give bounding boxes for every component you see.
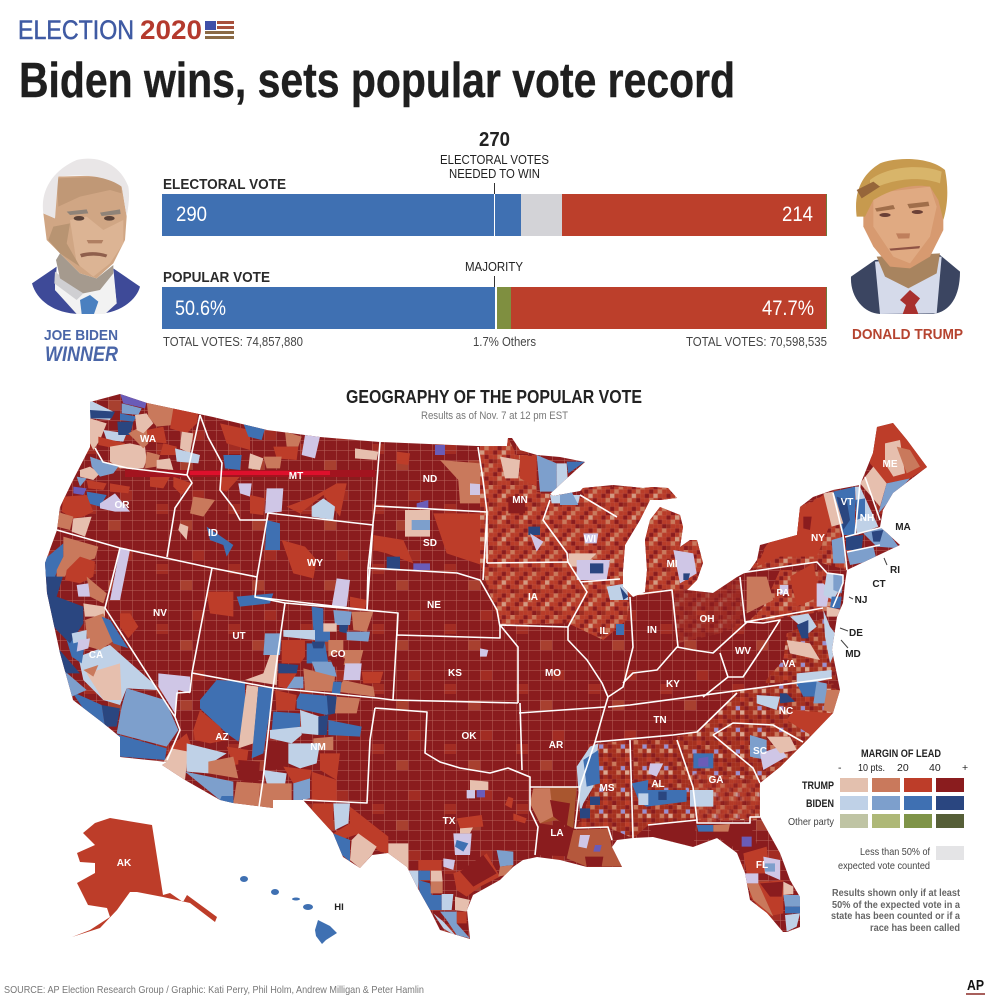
legend note: race has been called [870,923,960,934]
header logo: Election 2020: 2020 [140,15,202,45]
vote totals [163,335,827,349]
270 threshold label [440,129,549,194]
legend: margin of lead: - [838,762,842,774]
state labels: NV [153,608,167,619]
map: Hawaii: HI [334,902,344,913]
county map of the lower 48 states [30,380,940,950]
state labels: LA [550,828,564,839]
artifact streak across Montana [125,470,375,477]
map: Hawaii [240,876,344,944]
map: Alaska [72,818,217,937]
state labels: TN [653,715,667,726]
state labels: WI [584,534,596,545]
portrait: Donald Trump [851,159,960,314]
state labels: NE [427,600,441,611]
legend: margin of lead: 10 pts. [858,762,885,774]
state labels: WY [307,558,323,569]
state labels: AL [651,779,665,790]
state labels: VT [841,497,853,508]
patches: Arizona and New Mexico south [162,740,340,808]
state labels: MN [512,495,528,506]
state labels: MT [289,471,303,482]
bar chart: electoral vote [162,194,827,236]
state labels: WA [140,434,156,445]
name: Donald Trump: DONALD TRUMP [852,326,963,343]
state labels: IL [600,626,608,637]
legend note: state has been counted or if a [831,911,960,922]
patches: western states [40,393,492,765]
legend note: Results shown only if at least [832,888,961,899]
map heading: GEOGRAPHY OF THE POPULAR VOTE [346,387,642,407]
bar chart: popular vote: 47.7% [762,297,814,320]
state labels: TX [443,816,456,827]
state labels: IN [647,625,657,636]
legend: margin of lead: expected vote counted [838,860,930,872]
state labels: ID [208,528,218,539]
legend: margin of lead [788,748,968,872]
state labels: ND [423,474,437,485]
state labels: GA [708,775,724,786]
state labels: MO [545,668,561,679]
outside state labels with pointers: DE [849,628,863,639]
header logo: Election 2020: ELECTION [18,15,134,45]
state boundaries [57,415,883,855]
state labels: ME [882,459,898,470]
270 threshold label: 270 [479,129,510,151]
popular vote heading: POPULAR VOTE [163,270,270,286]
map heading [346,387,642,422]
270 threshold label: NEEDED TO WIN [449,167,540,181]
majority label [465,260,524,287]
bar chart: electoral vote: 290 [176,203,207,226]
legend note [831,888,961,934]
state labels: PA [776,588,790,599]
vote totals: 1.7% Others [473,335,536,349]
legend: margin of lead: Other party [788,816,835,828]
state labels [89,434,898,871]
state labels: AR [549,740,564,751]
outside state labels with pointers [840,522,911,660]
legend: margin of lead: 20 [897,762,909,774]
legend: margin of lead: 40 [929,762,941,774]
patches: eastern states [480,420,928,820]
state labels: OH [700,614,714,625]
source line: SOURCE: AP Election Research Group / Graphic: Kati Perry, Phil Holm, Andrew Milligan & Peter Hamlin [4,984,424,996]
state labels: VA [782,659,796,670]
outside state labels with pointers: NJ [855,595,867,606]
legend: margin of lead: MARGIN OF LEAD [861,748,941,760]
state labels: CO [330,649,346,660]
state labels: KS [448,668,462,679]
outside state labels with pointers: MD [845,649,861,660]
electoral vote heading: ELECTORAL VOTE [163,177,286,193]
majority label: MAJORITY [465,260,524,274]
state labels: OK [462,731,477,742]
bar chart: electoral vote: 214 [782,203,813,226]
state labels: SC [753,746,767,757]
state labels: NH [860,513,874,524]
icon: flag [205,21,234,39]
legend: margin of lead: + [962,762,968,774]
state labels: MI [666,559,678,570]
bar chart: popular vote [162,287,827,329]
state labels: AZ [215,732,229,743]
vote totals: TOTAL VOTES: 70,598,535 [686,335,827,349]
state labels: NC [779,706,793,717]
state labels: MS [600,783,615,794]
name: Joe Biden, winner: WINNER [45,343,119,366]
outside state labels with pointers: CT [872,579,886,590]
state labels: CA [89,650,103,661]
header logo: Election 2020 [18,15,234,45]
patches: Gulf states, Texas and Florida [312,740,800,938]
name: Joe Biden, winner: JOE BIDEN [44,327,118,344]
270 threshold label: ELECTORAL VOTES [440,153,549,167]
map heading: Results as of Nov. 7 at 12 pm EST [421,410,568,422]
legend: margin of lead: BIDEN [806,798,834,810]
state labels: UT [232,631,246,642]
legend note: 50% of the expected vote in a [832,900,960,911]
state labels: OR [114,500,130,511]
state labels: SD [423,538,437,549]
legend: margin of lead: TRUMP [802,780,834,792]
outside state labels with pointers: RI [890,565,900,576]
state labels: NM [310,742,326,753]
title: Biden wins, sets popular vote record [19,54,735,108]
AP logo: AP [967,977,984,994]
state labels: WV [735,646,751,657]
state labels: IA [528,592,538,603]
name: Joe Biden, winner [44,327,119,366]
map: Alaska: AK [117,858,132,869]
bar chart: popular vote: 50.6% [175,297,226,320]
state labels: KY [666,679,680,690]
state labels: FL [756,860,768,871]
legend: margin of lead: Less than 50% of [860,846,930,858]
state labels: NY [811,533,825,544]
outside state labels with pointers: MA [895,522,911,533]
portrait: Joe Biden [32,159,140,314]
vote totals: TOTAL VOTES: 74,857,880 [163,335,303,349]
